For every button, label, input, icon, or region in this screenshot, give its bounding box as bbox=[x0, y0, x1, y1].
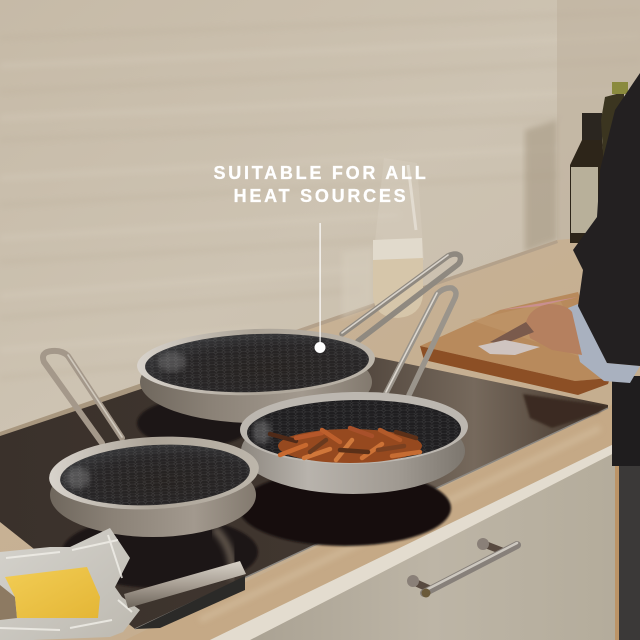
knife and chopped onion bbox=[478, 297, 578, 355]
medium frying pan with mushrooms bbox=[239, 288, 469, 494]
spatula handle bbox=[124, 561, 246, 608]
hob reflections bbox=[62, 394, 606, 629]
induction hob bbox=[0, 357, 608, 629]
cutting board bbox=[420, 292, 610, 395]
title: SUITABLE FOR ALL bbox=[214, 163, 428, 183]
bottles bbox=[570, 82, 628, 243]
milk jug bbox=[342, 158, 424, 318]
cabinet front bbox=[210, 443, 619, 640]
title: HEAT SOURCES bbox=[234, 186, 408, 206]
small frying pan bbox=[43, 351, 261, 537]
countertop bbox=[0, 238, 640, 640]
hob front edge bbox=[135, 408, 608, 629]
person torso and arm bbox=[526, 73, 640, 640]
pan handle bbox=[43, 351, 122, 443]
pan handle bbox=[386, 288, 456, 395]
pan handle bbox=[342, 254, 460, 341]
large frying pan bbox=[136, 254, 460, 423]
cabinet handle bbox=[407, 538, 517, 598]
pointer line and dot bbox=[314, 223, 326, 353]
title bbox=[214, 163, 428, 206]
counter front edge bbox=[125, 400, 616, 640]
marble wall bbox=[0, 0, 640, 450]
butter on foil wrapper bbox=[0, 528, 140, 640]
food bbox=[270, 428, 422, 463]
